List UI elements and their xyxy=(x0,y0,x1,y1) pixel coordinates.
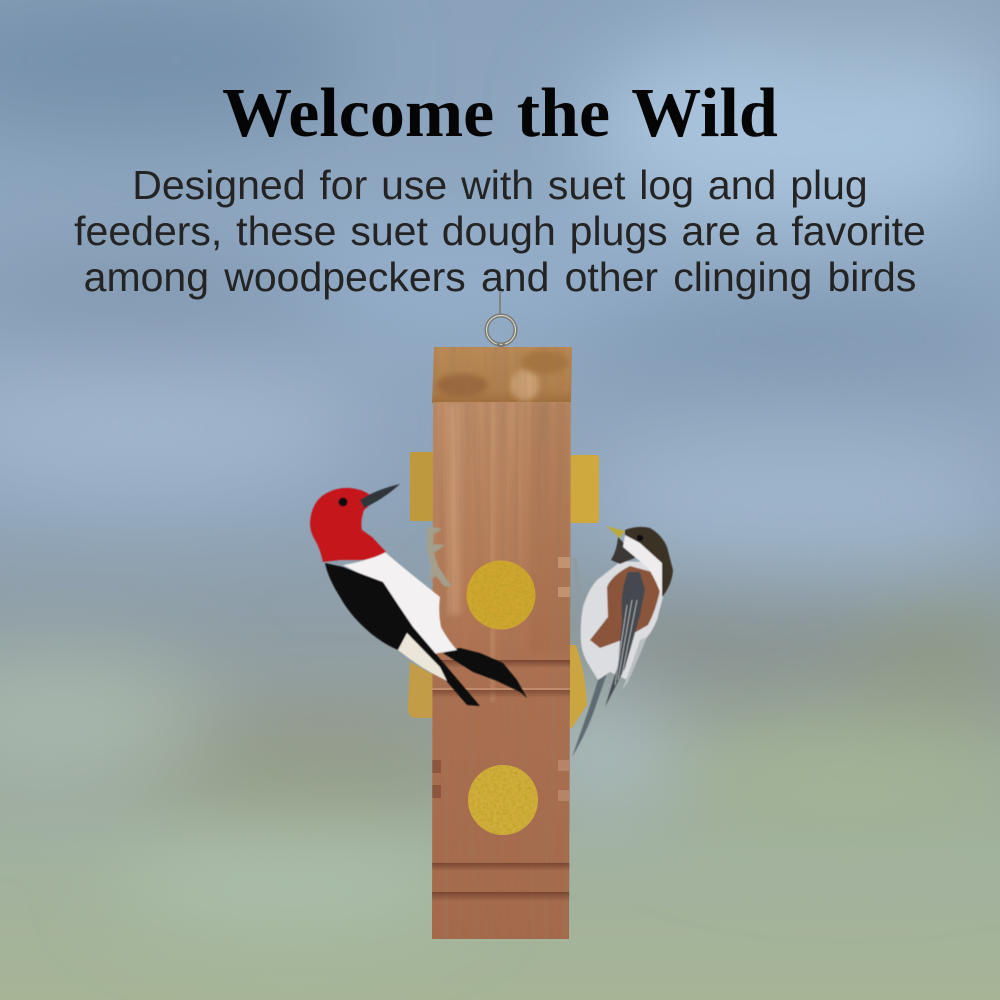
icon: red-headed woodpecker xyxy=(310,484,527,706)
description text: Designed for use with suet log and plug xyxy=(132,162,868,208)
icon: hanging hook and ring xyxy=(486,292,516,347)
lower grooves xyxy=(431,863,572,901)
suet blocks behind feeder xyxy=(408,452,599,728)
chickadee wing xyxy=(605,572,645,707)
woodpecker foot xyxy=(427,527,452,587)
chickadee beak xyxy=(606,526,625,538)
woodpecker white secondaries xyxy=(398,633,447,681)
chickadee wing feathers xyxy=(615,600,637,685)
woodpecker eye xyxy=(338,498,348,506)
title: Welcome the Wild xyxy=(222,75,778,152)
chickadee foot xyxy=(572,557,590,640)
chickadee throat xyxy=(611,537,637,564)
feeder: cedar log xyxy=(431,347,572,940)
suet plug: upper xyxy=(466,560,536,630)
woodpecker tail xyxy=(443,648,527,698)
chickadee body xyxy=(581,562,663,680)
chickadee eye xyxy=(637,535,643,541)
icon: chestnut-backed chickadee xyxy=(572,526,673,757)
description text: feeders, these suet dough plugs are a favorite xyxy=(74,208,926,254)
woodpecker beak xyxy=(360,484,400,508)
woodpecker red head xyxy=(310,488,386,562)
description text: among woodpeckers and other clinging birds xyxy=(84,254,916,300)
upper groove xyxy=(431,660,572,698)
description text xyxy=(74,162,926,300)
woodpecker black wing xyxy=(325,563,480,706)
feeder top cap xyxy=(432,347,572,403)
feeder front face xyxy=(431,402,572,940)
chickadee pale primaries xyxy=(622,637,647,690)
chickadee chestnut flank xyxy=(590,566,660,648)
chickadee tail xyxy=(572,665,610,757)
chickadee white cheek xyxy=(623,535,662,597)
chickadee cap xyxy=(625,527,673,597)
woodpecker white body xyxy=(343,552,457,654)
suet plug: lower xyxy=(468,765,538,835)
